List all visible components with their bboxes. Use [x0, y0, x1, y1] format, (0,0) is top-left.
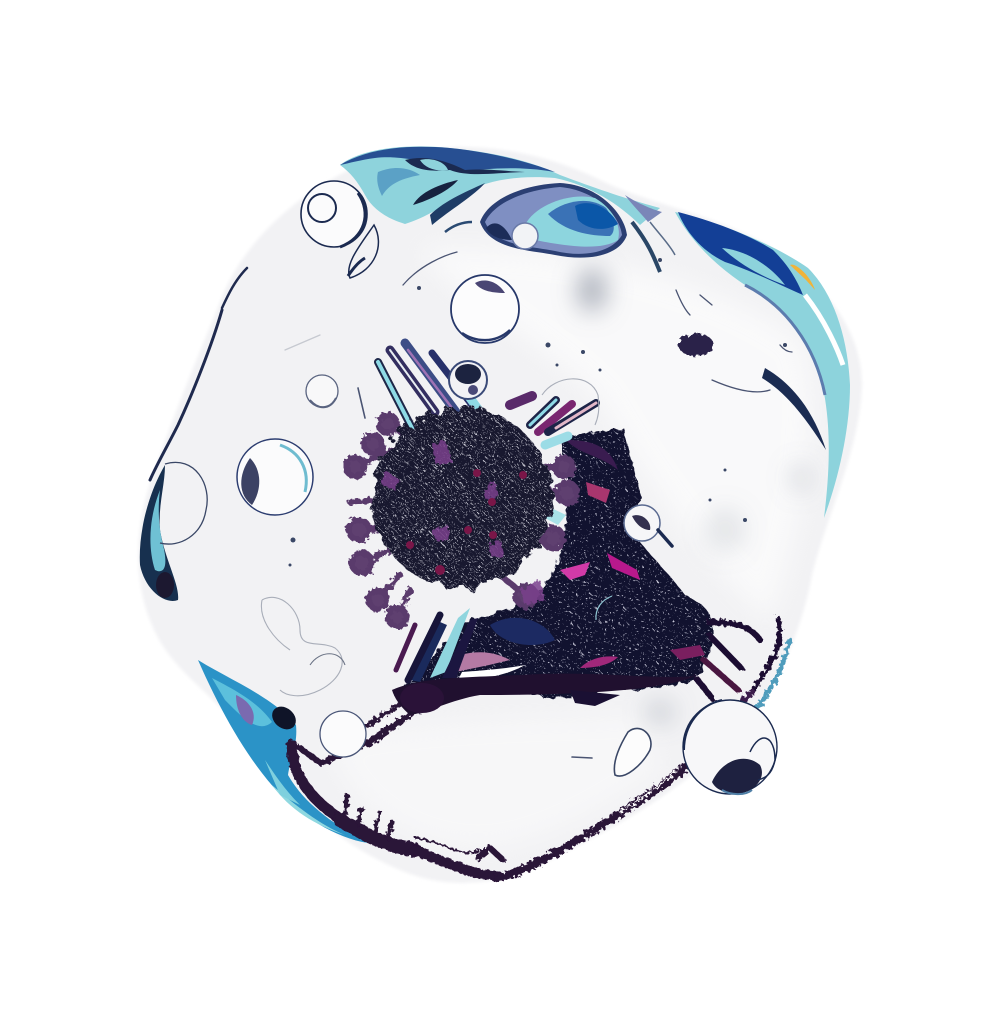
bubble: left large	[237, 439, 313, 515]
fluid swirl: left edge	[140, 465, 178, 601]
faint bubble outlines	[261, 379, 599, 696]
virus	[346, 343, 596, 680]
bubble: large lower right	[683, 700, 777, 794]
bubble: upper centre	[451, 275, 519, 343]
dark outline: left edge	[150, 268, 247, 480]
fluid swirl: top lens	[480, 183, 627, 258]
droplet: bottom centre	[614, 728, 651, 776]
virus tail: dark mass	[392, 427, 712, 715]
ribs: right side of tail	[696, 618, 790, 718]
dark star splat	[678, 334, 714, 356]
fluid swirl: lower left	[198, 660, 368, 843]
bubble: lower left	[320, 711, 366, 757]
fine strokes	[285, 252, 792, 758]
virus blotches	[382, 440, 545, 605]
fluid swirl: top edge	[340, 146, 675, 272]
bubble: on tail	[624, 505, 672, 546]
soft grey smudges	[577, 268, 810, 722]
bubble: top left	[301, 181, 378, 278]
virus spikes: long rays upper left	[378, 343, 486, 428]
specks and droplets	[288, 258, 787, 566]
virus lower rays	[396, 615, 440, 680]
virus spikes: trumpets	[346, 415, 577, 626]
bubble: top lens droplet	[512, 223, 538, 249]
virus spikes: upper right	[510, 396, 596, 445]
bubble: small on virus	[449, 361, 487, 399]
bubble: left edge	[160, 462, 207, 544]
fluid swirl: right band	[675, 212, 850, 518]
bubble body	[138, 147, 862, 883]
bubble: left small	[306, 375, 338, 407]
virus core	[372, 408, 552, 588]
dark membrane: bottom loop	[292, 695, 688, 878]
